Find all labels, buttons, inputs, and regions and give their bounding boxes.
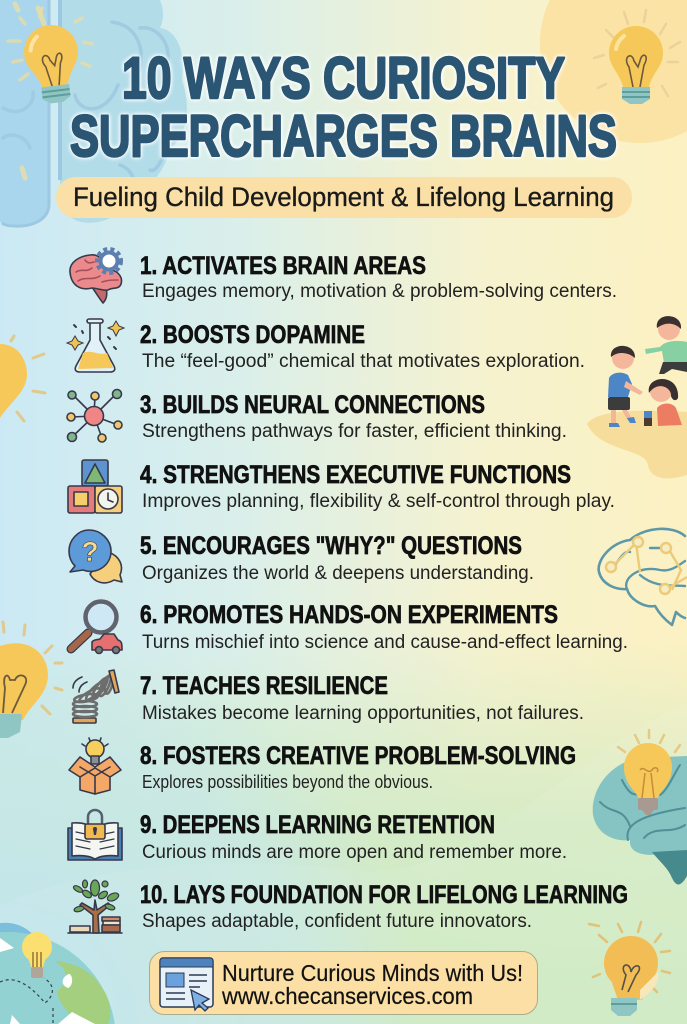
heading: 3. BUILDS NEURAL CONNECTIONS [140, 391, 485, 419]
decoration: teal brain with bulb [593, 730, 687, 884]
decoration: top-right circle [540, 0, 687, 143]
decoration: top-left brain [0, 0, 187, 226]
heading: 6. PROMOTES HANDS-ON EXPERIMENTS [140, 601, 558, 629]
icon: slinky spring [73, 670, 119, 723]
footer text: Nurture Curious Minds with Us! [222, 960, 523, 986]
decoration: bulb bottom right [589, 922, 670, 1016]
description: Curious minds are more open and remember more. [142, 842, 567, 863]
sand patch [587, 411, 687, 478]
decoration: left bulb [0, 336, 45, 421]
icon: neural network [67, 390, 122, 442]
heading: 5. ENCOURAGES "WHY?" QUESTIONS [140, 532, 522, 560]
title: 10 WAYS CURIOSITY [122, 46, 565, 111]
icon: question speech bubbles [69, 530, 122, 583]
icon: bulb top right [594, 10, 680, 104]
icon: brain with gear [70, 249, 122, 303]
description: Turns mischief into science and cause-and-effect learning. [142, 632, 628, 653]
heading: 7. TEACHES RESILIENCE [140, 672, 388, 700]
item 6 [71, 601, 628, 654]
item 3 [67, 390, 567, 442]
icon: browser window with cursor [160, 958, 213, 1011]
icon: book with padlock [68, 810, 122, 860]
description: Improves planning, flexibility & self-control through play. [142, 491, 615, 512]
decoration: left bulb lower [0, 622, 62, 738]
decoration: outlined brain [599, 529, 687, 625]
heading: 1. ACTIVATES BRAIN AREAS [140, 252, 426, 280]
item 5 [69, 530, 534, 584]
item 7 [73, 670, 584, 724]
subtitle pill: Fueling Child Development & Lifelong Learning [73, 182, 614, 212]
description: Mistakes become learning opportunities, not failures. [142, 703, 584, 724]
heading: 8. FOSTERS CREATIVE PROBLEM-SOLVING [140, 742, 576, 770]
boy [608, 346, 643, 427]
icon: toy blocks [68, 460, 122, 513]
footer text: www.checanservices.com [221, 983, 473, 1009]
description: The “feel-good” chemical that motivates exploration. [142, 351, 585, 372]
item 1 [70, 249, 617, 303]
heading: 4. STRENGTHENS EXECUTIVE FUNCTIONS [140, 461, 571, 489]
icon: bulb top left [8, 8, 92, 106]
item 4 [68, 460, 615, 513]
description: Organizes the world & deepens understanding. [142, 563, 534, 584]
decoration: globe with bulb [0, 923, 115, 1024]
item 8 [69, 738, 576, 794]
icon: flask with sparkles [67, 319, 124, 372]
icon: tree with books [68, 880, 122, 933]
item 10 [68, 880, 628, 933]
description: Strengthens pathways for faster, efficient thinking. [142, 421, 567, 442]
item 2 [67, 319, 585, 372]
icon: question speech bubbles: ? [81, 536, 99, 567]
description: Engages memory, motivation & problem-solving centers. [142, 281, 617, 302]
footer call to action [150, 952, 538, 1014]
description: Shapes adaptable, confident future innovators. [142, 911, 532, 932]
description: Explores possibilities beyond the obvious. [142, 772, 433, 792]
child standing [645, 316, 687, 374]
heading: 9. DEEPENS LEARNING RETENTION [140, 811, 495, 839]
heading: 2. BOOSTS DOPAMINE [140, 321, 365, 349]
item 9 [68, 810, 567, 863]
title [70, 46, 617, 169]
icon: open box with bulb [69, 738, 121, 794]
footer text [221, 960, 523, 1009]
girl [644, 379, 682, 426]
icon: magnifier and toy car [71, 602, 122, 654]
illustration: children playing [587, 316, 687, 478]
